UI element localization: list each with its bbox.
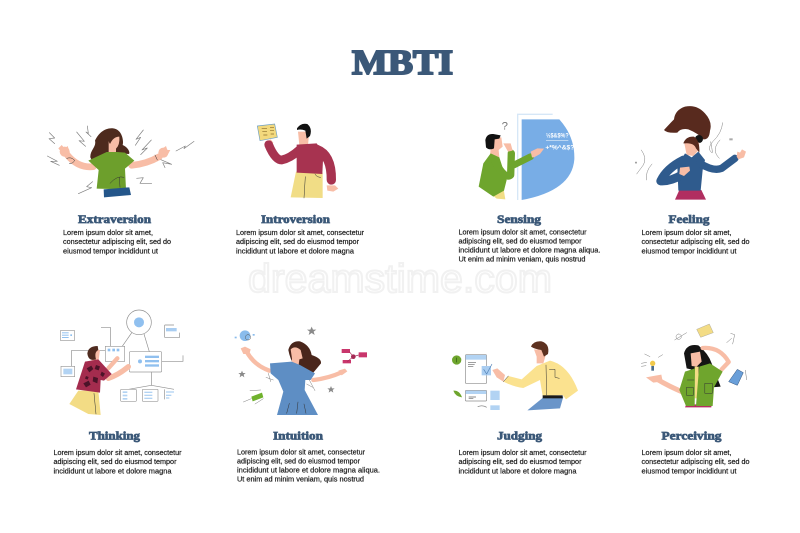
- illustration: man ticking a checklist: [452, 341, 578, 410]
- body text: Intuition: Ut enim ad minim veniam, quis nostrud: [237, 476, 364, 484]
- illustration: man at blue board with symbols: ½$&$%?: [546, 132, 569, 140]
- body text: Perceiving: eiusmod tempor incididunt ut: [642, 468, 737, 475]
- body text: Introversion: Lorem ipsum dolor sit amet, consectetur: [236, 230, 365, 237]
- panel: sensing: [458, 114, 601, 264]
- body text: Sensing: incididunt ut labore et dolore magna aliqua.: [458, 248, 601, 254]
- illustration: person with flowchart: [60, 310, 183, 415]
- body text: Sensing: Lorem ipsum dolor sit amet, consectetur: [458, 230, 587, 236]
- heading: Extraversion: Extraversion: [78, 212, 151, 226]
- illustration: woman in blue dress with floating ideas: [235, 327, 367, 415]
- body text: Intuition: adipiscing elit, sed do eiusmod tempor: [237, 458, 361, 466]
- illustration: man at blue board with symbols: +*%^&$?: [545, 144, 574, 152]
- body text: Sensing: Ut enim ad minim veniam, quis nostrud: [458, 256, 586, 264]
- heading: Introversion: Introversion: [261, 212, 330, 226]
- illustration: woman with flowing hair and hand on chest: [635, 106, 746, 200]
- illustration: man at blue board with symbols: ?: [502, 120, 508, 132]
- illustration: woman with lightning bolts: [47, 126, 194, 197]
- heading: Perceiving: Perceiving: [662, 428, 722, 442]
- body text: Feeling: [642, 230, 750, 255]
- body text: Perceiving: [642, 450, 750, 475]
- body text: Perceiving: consectetur adipiscing elit, sed do: [642, 459, 750, 466]
- body text: Intuition: [237, 450, 380, 484]
- panel: extraversion: [47, 126, 194, 255]
- body text: Sensing: [458, 230, 601, 264]
- body text: Introversion: [236, 230, 365, 255]
- body text: Feeling: eiusmod tempor incididunt ut: [642, 248, 737, 255]
- title: MBTI: [352, 43, 453, 82]
- body text: Perceiving: Lorem ipsum dolor sit amet,: [642, 450, 732, 457]
- body text: Extraversion: eiusmod tempor incididunt ut: [63, 248, 158, 255]
- illustration: woman in green jacket with lightbulb: [641, 324, 747, 407]
- body text: Extraversion: Lorem ipsum dolor sit amet,: [63, 230, 153, 237]
- heading: Intuition: Intuition: [273, 428, 323, 442]
- body text: Thinking: Lorem ipsum dolor sit amet, consectetur: [54, 450, 182, 457]
- body text: Judging: Lorem ipsum dolor sit amet, consectetur: [458, 450, 587, 457]
- body text: Extraversion: [63, 230, 171, 255]
- body text: Thinking: [54, 450, 182, 475]
- panel: judging: [452, 341, 587, 475]
- body text: Thinking: incididunt ut labore et dolore magna: [54, 468, 172, 475]
- heading: Sensing: Sensing: [497, 212, 541, 226]
- illustration: man reading a book: [257, 124, 338, 198]
- illustration: man at blue board with symbols: [479, 114, 574, 200]
- body text: Sensing: adipiscing elit, sed do eiusmod tempor: [458, 238, 582, 246]
- body text: Thinking: adipiscing elit, sed do eiusmod tempor: [54, 459, 177, 466]
- panel: thinking: [54, 310, 183, 475]
- body text: Feeling: consectetur adipiscing elit, sed do: [642, 239, 750, 246]
- body text: Judging: [458, 450, 587, 475]
- body text: Extraversion: consectetur adipiscing elit, sed do: [63, 239, 171, 246]
- body text: Introversion: adipiscing elit, sed do eiusmod tempor: [236, 239, 360, 246]
- panel: intuition: [235, 327, 380, 484]
- body text: Intuition: incididunt ut labore et dolore magna aliqua.: [237, 468, 380, 474]
- panel: introversion: [236, 124, 365, 255]
- heading: Feeling: Feeling: [668, 212, 710, 226]
- body text: Judging: incididunt ut labore et dolore magna: [458, 468, 577, 475]
- panel: feeling: [635, 106, 750, 255]
- watermark: dreamstime.com: [248, 257, 552, 301]
- body text: Judging: adipiscing elit, sed do eiusmod tempor: [458, 459, 582, 466]
- heading: Thinking: Thinking: [89, 428, 140, 442]
- body text: Feeling: Lorem ipsum dolor sit amet,: [642, 230, 732, 237]
- body text: Introversion: incididunt ut labore et dolore magna: [236, 248, 354, 255]
- heading: Judging: Judging: [497, 428, 542, 442]
- body text: Intuition: Lorem ipsum dolor sit amet, consectetur: [237, 450, 366, 456]
- panel: perceiving: [641, 324, 750, 475]
